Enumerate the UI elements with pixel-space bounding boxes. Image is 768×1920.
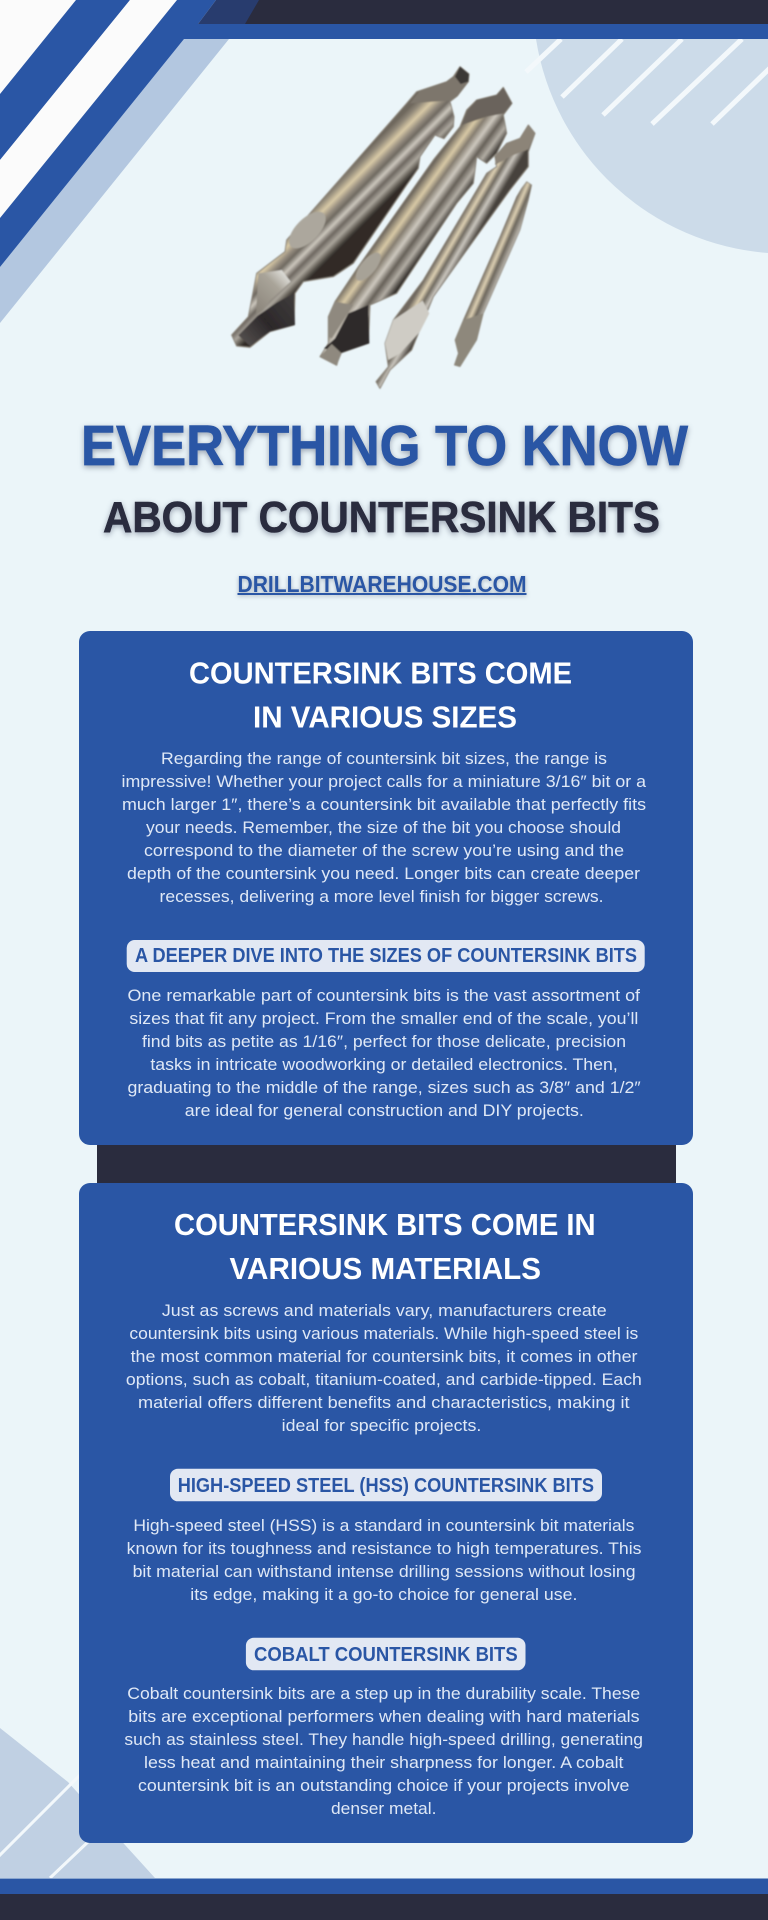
heading: various materials: VARIOUS MATERIALS — [230, 1251, 541, 1286]
heading: various materials: COUNTERSINK BITS COME IN — [174, 1207, 596, 1242]
paragraph: cobalt: such as stainless steel. They handle high-speed drilling, generating — [124, 1731, 643, 1749]
subheading pill: deeper dive: A DEEPER DIVE INTO THE SIZES OF COUNTERSINK BITS — [135, 944, 637, 967]
decoration: top left diagonal stripes — [0, 0, 229, 323]
paragraph: HSS: High-speed steel (HSS) is a standard in countersink bit materials — [133, 1517, 634, 1535]
paragraph: range of sizes: impressive! Whether your project calls for a miniature 3/16″ bit or a — [122, 773, 647, 791]
paragraph: materials intro: Just as screws and materials vary, manufacturers create — [162, 1302, 607, 1320]
paragraph: cobalt: less heat and maintaining their sharpness for longer. A cobalt — [144, 1754, 624, 1772]
title line 1: EVERYTHING TO KNOW — [81, 414, 688, 478]
bit 4 — [454, 182, 532, 367]
dark connector between panels — [97, 1140, 676, 1188]
paragraph: deeper dive: sizes that fit any project. From the smaller end of the scale, you’ll — [129, 1010, 638, 1028]
heading: various sizes — [189, 656, 572, 734]
panel: various materials — [79, 1183, 693, 1843]
subheading pill: cobalt: COBALT COUNTERSINK BITS — [254, 1643, 518, 1666]
decoration: top right circle with stripes — [526, 39, 768, 253]
top header bars — [184, 0, 768, 39]
paragraph: HSS — [127, 1517, 641, 1604]
paragraph: range of sizes: recesses, delivering a more level finish for bigger screws. — [160, 888, 604, 906]
paragraph: range of sizes: your needs. Remember, the size of the bit you choose should — [146, 819, 621, 837]
paragraph: deeper dive — [128, 987, 641, 1120]
subheading pill: cobalt — [246, 1638, 526, 1670]
heading: various sizes: COUNTERSINK BITS COME — [189, 656, 572, 690]
paragraph: HSS: bit material can withstand intense drilling sessions without losing — [133, 1563, 636, 1581]
subheading pill: HSS: HIGH-SPEED STEEL (HSS) COUNTERSINK BITS — [178, 1474, 594, 1497]
paragraph: cobalt — [124, 1685, 643, 1818]
paragraph: cobalt: countersink bit is an outstanding choice if your projects involve — [138, 1777, 629, 1795]
heading: various materials — [174, 1207, 596, 1286]
paragraph: materials intro: countersink bits using various materials. While high-speed steel is — [129, 1325, 638, 1343]
title line 2: ABOUT COUNTERSINK BITS — [103, 493, 660, 542]
paragraph: range of sizes — [122, 750, 647, 906]
decoration: bottom left shape with lines — [0, 1728, 155, 1878]
bit 1 — [232, 67, 469, 347]
paragraph: range of sizes: much larger 1″, there’s a countersink bit available that perfectly fits — [122, 796, 646, 814]
paragraph: cobalt: denser metal. — [331, 1800, 436, 1818]
paragraph: cobalt: Cobalt countersink bits are a step up in the durability scale. These — [127, 1685, 640, 1703]
paragraph: materials intro: material offers different benefits and characteristics, making it — [138, 1394, 630, 1412]
subheading pill: HSS — [170, 1469, 602, 1501]
paragraph: HSS: known for its toughness and resistance to high temperatures. This — [127, 1540, 641, 1558]
footer bars — [0, 1878, 768, 1920]
image: four countersink drill bits — [232, 67, 535, 388]
paragraph: deeper dive: are ideal for general construction and DIY projects. — [185, 1102, 584, 1120]
paragraph: materials intro — [126, 1302, 642, 1435]
paragraph: deeper dive: tasks in intricate woodworking or detailed electronics. Then, — [150, 1056, 618, 1074]
paragraph: materials intro: options, such as cobalt, titanium-coated, and carbide-tipped. Each — [126, 1371, 642, 1389]
paragraph: range of sizes: correspond to the diameter of the screw you’re using and the — [144, 842, 624, 860]
subheading pill: deeper dive — [127, 940, 645, 972]
website link: DRILLBITWAREHOUSE.COM — [238, 571, 526, 597]
paragraph: materials intro: the most common material for countersink bits, it comes in other — [131, 1348, 638, 1366]
paragraph: deeper dive: One remarkable part of countersink bits is the vast assortment of — [128, 987, 640, 1005]
paragraph: range of sizes: Regarding the range of countersink bit sizes, the range is — [161, 750, 607, 768]
paragraph: materials intro: ideal for specific projects. — [282, 1417, 481, 1435]
panel: various sizes — [79, 631, 693, 1145]
paragraph: deeper dive: find bits as petite as 1/16″, perfect for those delicate, precision — [142, 1033, 626, 1051]
paragraph: HSS: its edge, making it a go-to choice for general use. — [190, 1586, 577, 1604]
bit 3 — [376, 125, 535, 388]
paragraph: range of sizes: depth of the countersink you need. Longer bits can create deeper — [127, 865, 641, 883]
paragraph: cobalt: bits are exceptional performers when dealing with hard materials — [128, 1708, 640, 1726]
bit 2 — [320, 87, 512, 365]
heading: various sizes: IN VARIOUS SIZES — [253, 700, 517, 734]
paragraph: deeper dive: graduating to the middle of the range, sizes such as 3/8″ and 1/2″ — [128, 1079, 641, 1097]
